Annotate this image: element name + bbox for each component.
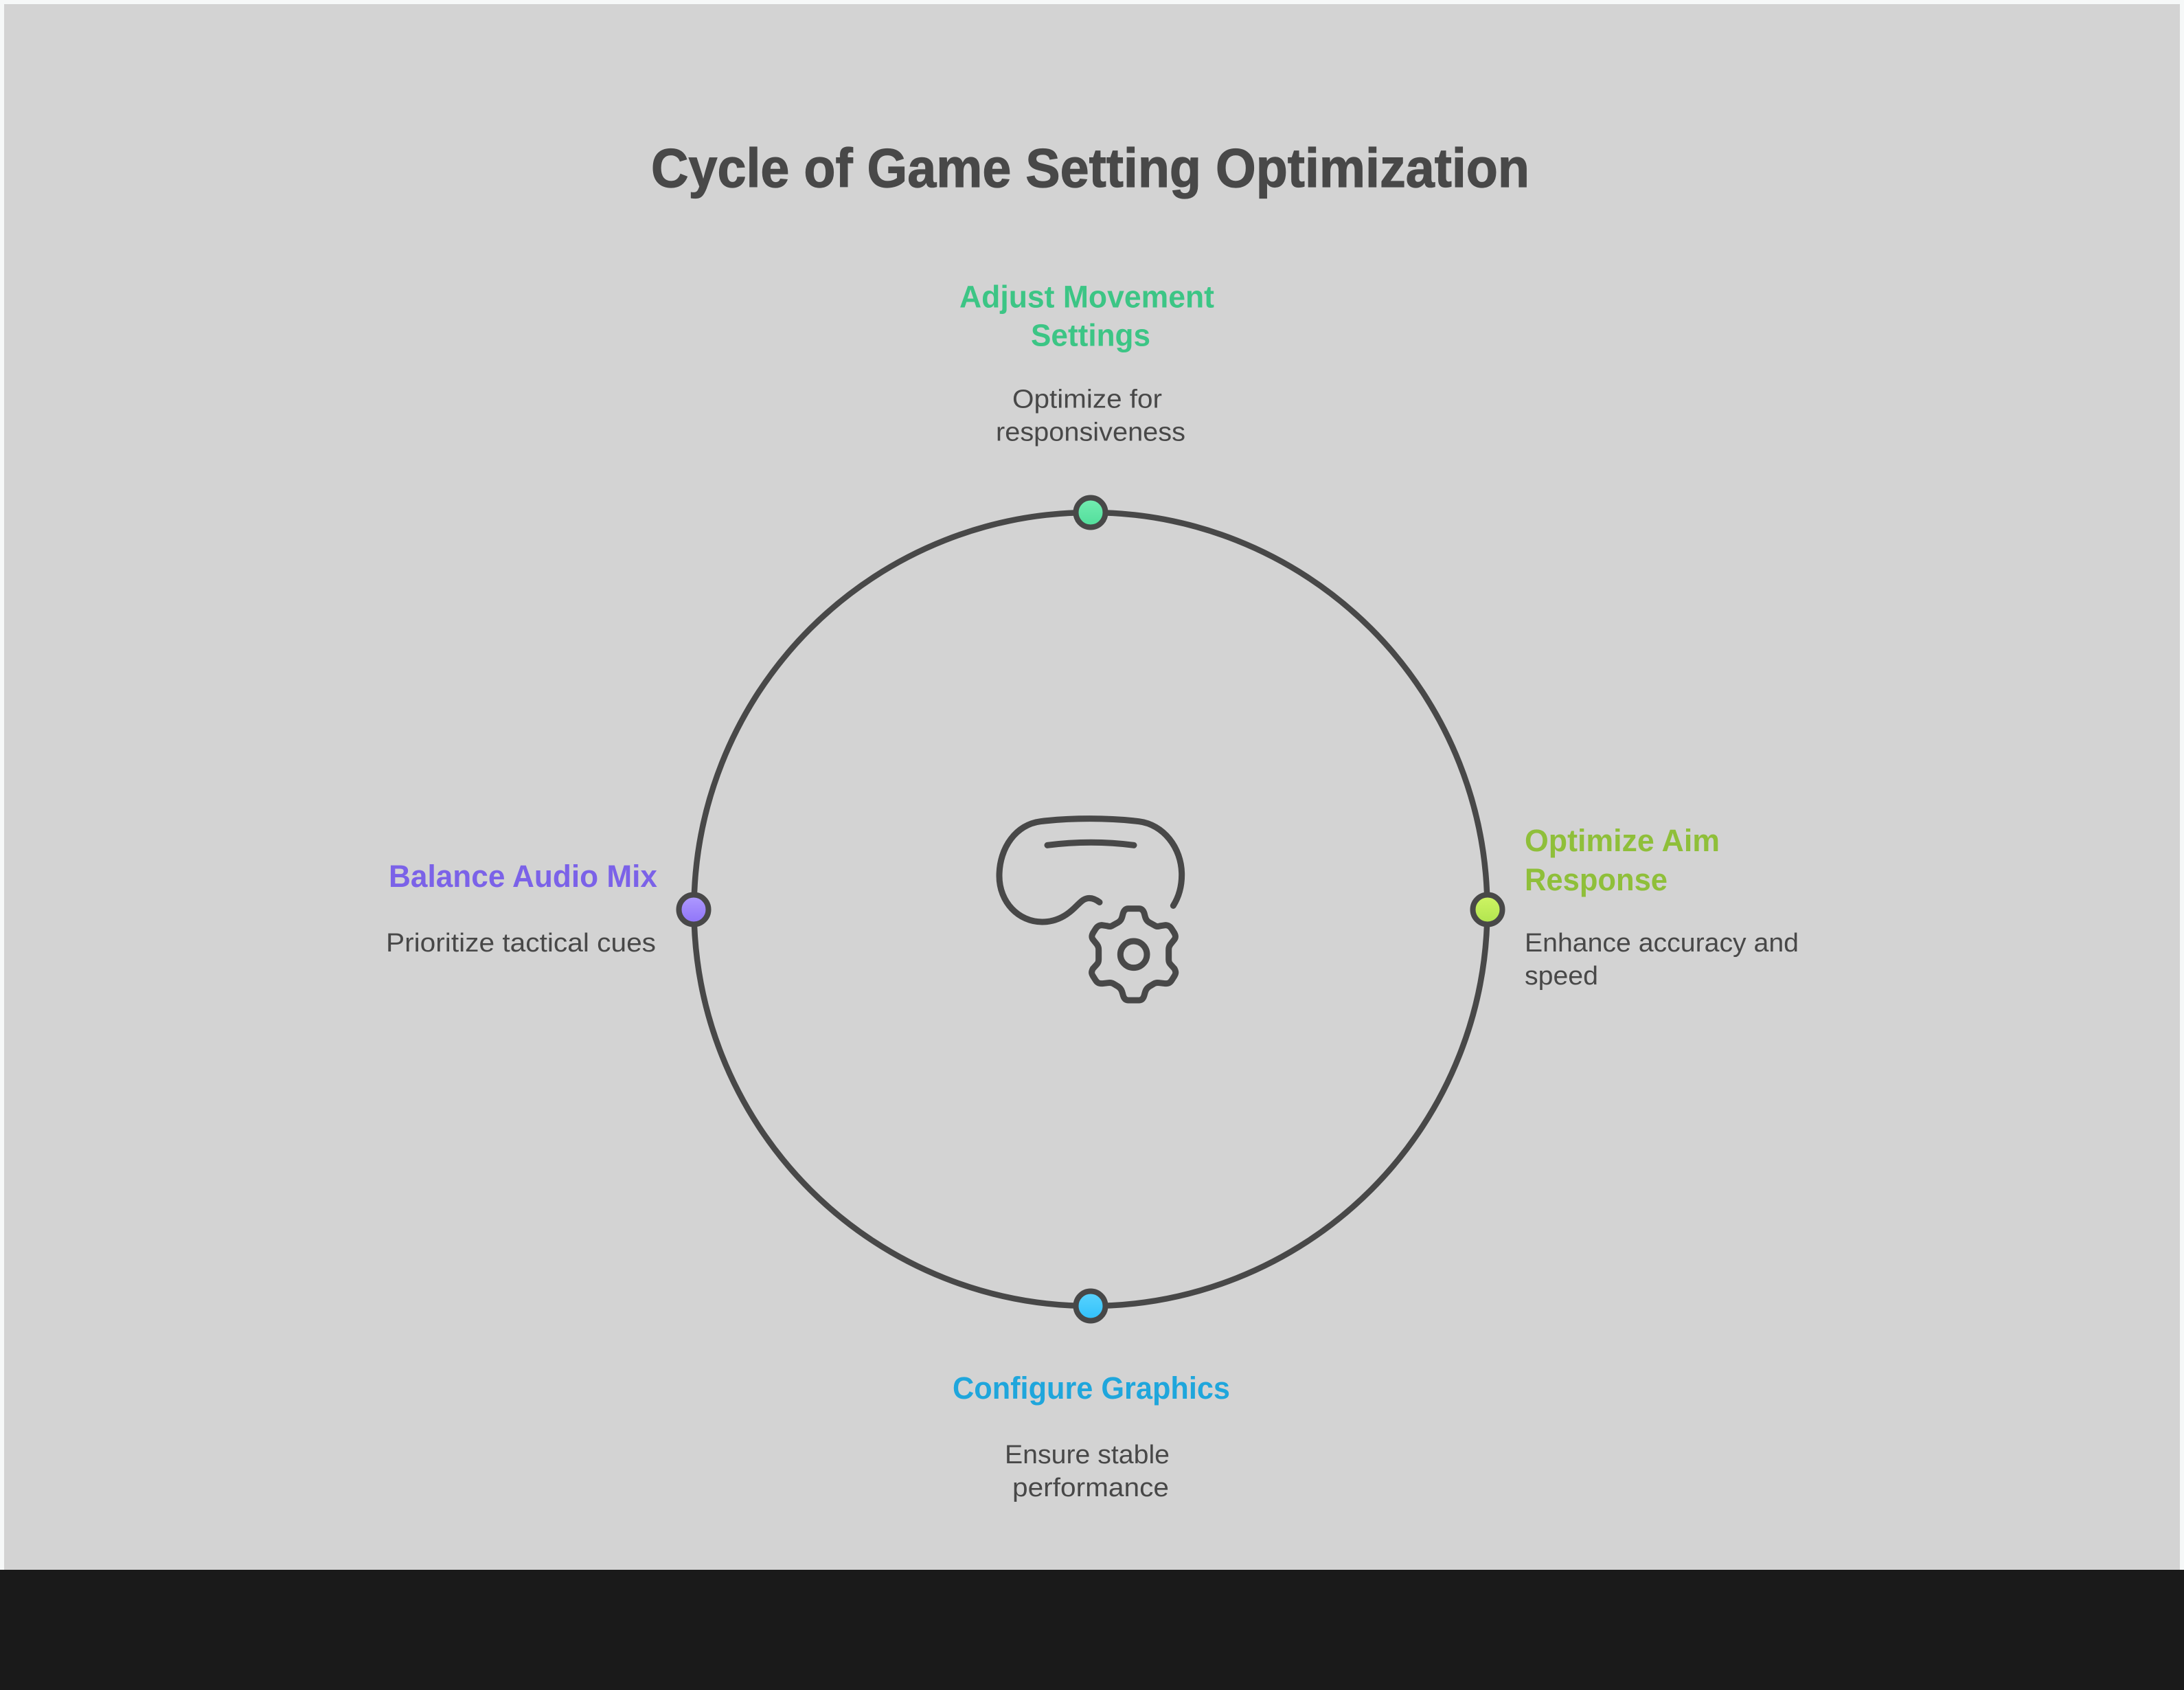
cycle ring [694,512,1488,1306]
icon part: gear [1092,909,1176,1000]
heading: Adjust Movement Settings: Adjust Movement [959,279,1214,315]
heading: Optimize Aim Response: Optimize Aim [1525,823,1720,858]
description: Enhance accuracy and speed: speed [1525,962,1598,991]
description: Enhance accuracy and speed [1525,929,1799,991]
step: Optimize Aim Response [1525,823,1799,991]
title: Cycle of Game Setting Optimization [651,137,1529,199]
description: Ensure stable performance: Ensure stable [1005,1441,1170,1469]
description: Optimize for responsiveness: responsiveness [996,418,1185,447]
heading: Adjust Movement Settings: Settings [1031,317,1150,353]
icon part: gear hub [1120,941,1147,968]
footer band [0,1570,2184,1690]
description: Prioritize tactical cues: Prioritize tactical cues [386,929,656,958]
node: left purple [679,894,709,925]
description: Ensure stable performance: performance [1012,1474,1169,1502]
description: Optimize for responsiveness [996,385,1185,447]
icon: VR headset with gear [999,819,1182,1000]
heading: Configure Graphics: Configure Graphics [953,1371,1230,1406]
description: Optimize for responsiveness: Optimize for [1012,385,1162,414]
heading: Optimize Aim Response: Response [1525,862,1668,897]
step: Configure Graphics [953,1371,1230,1502]
icon part: headset outline [999,819,1182,922]
description: Enhance accuracy and speed: Enhance accuracy and [1525,929,1799,958]
heading: Adjust Movement Settings [959,279,1214,353]
node: top green [1076,497,1106,528]
icon part: visor line [1047,842,1134,845]
description: Ensure stable performance [1005,1441,1170,1502]
heading: Optimize Aim Response [1525,823,1720,897]
node: bottom blue [1076,1292,1106,1320]
step: Balance Audio Mix [386,859,657,958]
node: right lime [1472,894,1503,925]
step: Adjust Movement Settings [959,279,1214,447]
heading: Balance Audio Mix: Balance Audio Mix [389,859,657,894]
